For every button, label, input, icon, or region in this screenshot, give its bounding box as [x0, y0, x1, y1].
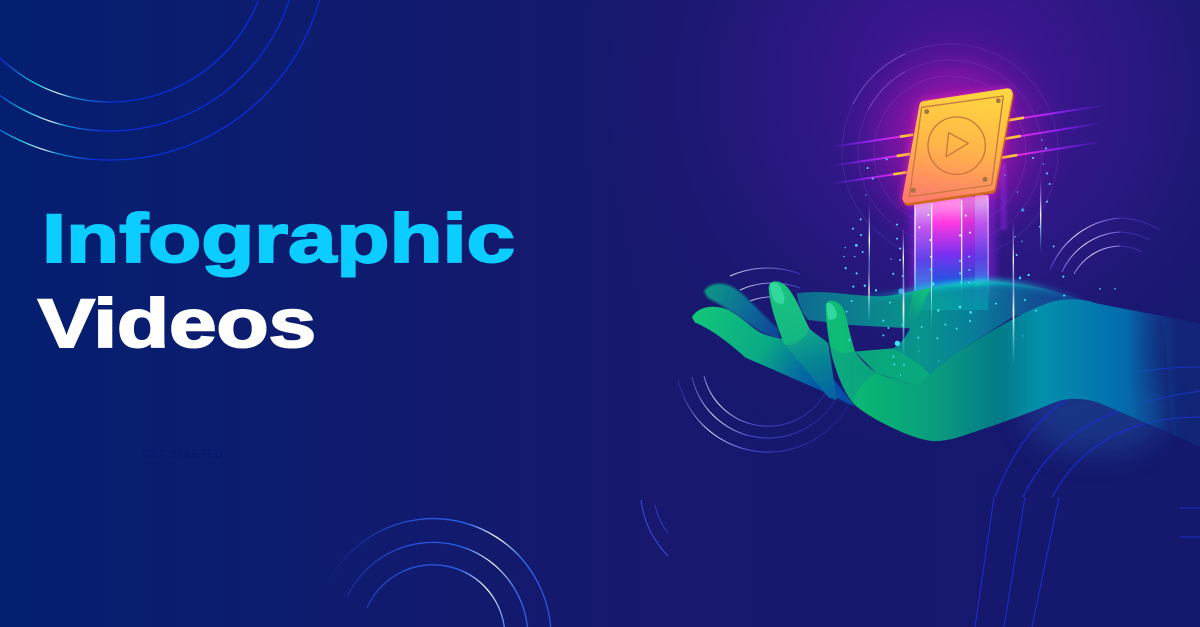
- faint button label: GET STARTED: [142, 447, 223, 461]
- front finger lower shade: [829, 343, 877, 403]
- hand: [692, 257, 1200, 447]
- middle fingernail: [770, 283, 785, 304]
- chip halo: [902, 88, 1012, 205]
- top-left rings: [0, 0, 327, 160]
- hand particles: [845, 267, 1116, 376]
- icon: play button: [928, 117, 985, 174]
- far finger: [704, 284, 780, 340]
- lower palm tint: [855, 348, 930, 386]
- bottom rings: [330, 519, 551, 627]
- front fingernail: [827, 303, 837, 320]
- beam halo: [910, 193, 995, 300]
- vertical light lines: [869, 177, 1041, 300]
- particle dots: [843, 139, 1116, 296]
- lower-left arc fragments: [641, 500, 668, 556]
- chip glow: [840, 25, 1070, 255]
- green wedge: [902, 288, 932, 328]
- chip screws: [911, 99, 1000, 192]
- wrist glow: [1025, 377, 1165, 453]
- title line: Videos: Videos: [38, 285, 316, 362]
- chip inner frame: [909, 96, 1003, 197]
- light beams: [915, 195, 988, 310]
- right lines: [975, 367, 1200, 627]
- hand rings: [678, 268, 855, 452]
- purple glow: [560, 0, 1200, 480]
- middle finger knuckle shade: [784, 328, 837, 400]
- chip, rays and beams: [827, 88, 1116, 310]
- title line: Infographic: Infographic: [42, 200, 515, 277]
- light lines over hand: [868, 257, 1014, 367]
- side glow column: [1001, 163, 1007, 230]
- palm and front finger: [826, 299, 1171, 442]
- back palm translucent: [797, 281, 1083, 386]
- chip face: [907, 93, 1008, 198]
- glowing upper edge: [867, 282, 1083, 300]
- chip rings: [842, 44, 1058, 260]
- index finger: [692, 307, 855, 407]
- right rings near chip: [1050, 218, 1160, 274]
- chip body: [908, 96, 1009, 201]
- faded hand extension: [1097, 303, 1200, 447]
- title: [38, 200, 515, 362]
- chip rays: [827, 105, 1107, 184]
- middle finger: [769, 281, 855, 407]
